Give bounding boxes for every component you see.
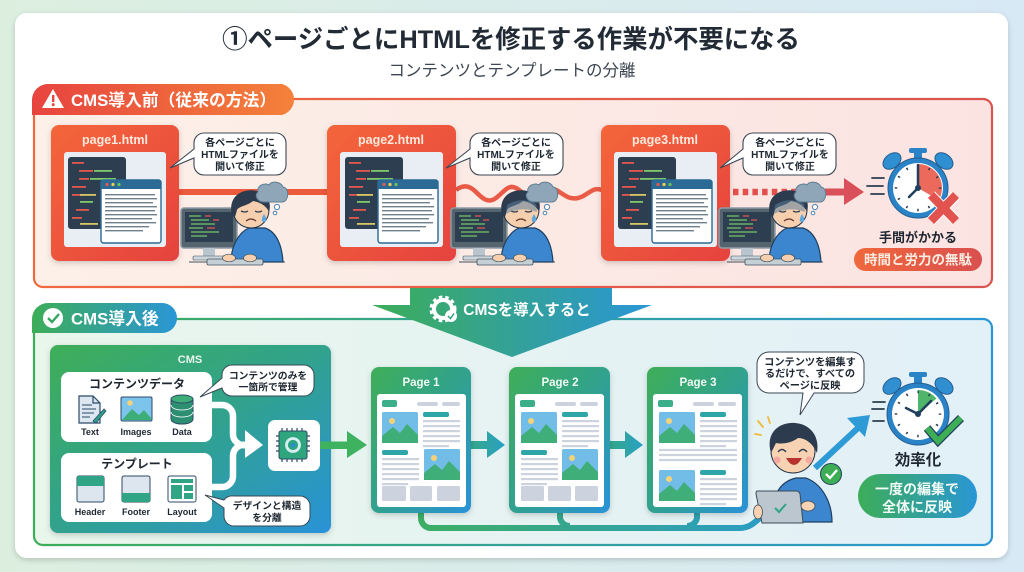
- banner arrow: when CMS is introduced: CMSを導入すると: [463, 300, 591, 319]
- icon: happy editor with tablet: [754, 417, 832, 523]
- icon: clock with check: [872, 372, 961, 445]
- icon: footer: Footer: [122, 507, 150, 517]
- icon: header: Header: [75, 507, 106, 517]
- icon: header: [75, 476, 106, 517]
- icon: data: Data: [172, 427, 193, 437]
- connector: straight line page1 to page2: [179, 189, 329, 195]
- panel: after CMS: [32, 303, 992, 545]
- connector: pages to editor: [421, 513, 762, 528]
- box: template: [61, 453, 212, 522]
- callout: page1: 各ページごとに: [205, 136, 275, 149]
- callout: edit once: るだけで、すべての: [765, 368, 855, 380]
- callout: page3: 各ページごとに: [755, 136, 825, 149]
- connector: wavy line page2 to page3: [456, 186, 602, 200]
- box: content data: コンテンツデータ: [89, 376, 185, 391]
- card: Page 1: [371, 367, 471, 513]
- callout: content only: コンテンツのみを: [229, 370, 307, 382]
- card: Page 1: Page 1: [402, 377, 440, 389]
- white merge arrows: [212, 405, 263, 487]
- box: template: テンプレート: [101, 457, 173, 471]
- icon: clock with cross: [867, 148, 956, 221]
- callout: design and structure: [205, 495, 310, 526]
- box: content data: [61, 372, 212, 442]
- card: Page 2: Page 2: [541, 377, 579, 389]
- card: Page 2: [509, 367, 610, 513]
- icon: text document: [79, 396, 106, 437]
- icon: footer: [122, 476, 150, 517]
- icon: data: [171, 395, 193, 437]
- callout: page3: [720, 133, 836, 175]
- tab: before CMS heading: CMS導入前（従来の方法）: [71, 90, 276, 110]
- panel: CMS: [50, 345, 331, 533]
- tab: after CMS heading: [32, 303, 177, 333]
- arrow: CMS to pages: [320, 431, 367, 458]
- callout: page2: 開いて修正: [491, 160, 541, 173]
- tab: after CMS heading: CMS導入後: [71, 308, 159, 328]
- box: processor: [268, 420, 320, 471]
- card: page1.html: [51, 125, 179, 261]
- tab: before CMS heading: [32, 84, 294, 115]
- callout: content only: [200, 365, 314, 397]
- card: Page 3: [647, 367, 748, 513]
- pill: one edit reflects everywhere: 一度の編集で: [875, 481, 959, 497]
- icon: check badge: [820, 464, 842, 484]
- arrow: page1 to page2: [471, 431, 505, 458]
- icon: images: Images: [120, 427, 152, 437]
- card: page2.html: [327, 125, 456, 261]
- callout: page1: 開いて修正: [215, 160, 265, 173]
- callout: page2: [446, 133, 563, 175]
- callout: design and structure: デザインと構造: [233, 499, 301, 512]
- label: efficiency: 効率化: [895, 451, 942, 469]
- arrow: rising blue arrow: [815, 415, 870, 468]
- card: page2.html: page2.html: [358, 133, 424, 147]
- icon: text document: Text: [81, 427, 99, 437]
- connector: dotted arrow to clock: [733, 178, 864, 205]
- pill: one edit reflects everywhere: [858, 474, 977, 518]
- callout: design and structure: を分離: [252, 511, 282, 524]
- card: page1.html: page1.html: [82, 133, 148, 147]
- arrow: page2 to page3: [610, 431, 643, 458]
- pill: waste of time and effort: 時間と労力の無駄: [864, 252, 972, 268]
- icon: tired developer 1: [181, 182, 288, 265]
- subtitle: コンテンツとテンプレートの分離: [388, 61, 636, 80]
- pill: waste of time and effort: [854, 248, 982, 271]
- callout: edit once: [757, 352, 864, 415]
- callout: page2: 各ページごとに: [481, 136, 551, 149]
- card: page3.html: page3.html: [632, 133, 698, 147]
- callout: edit once: コンテンツを編集す: [764, 356, 856, 368]
- card: Page 3: Page 3: [679, 377, 717, 389]
- icon: layout: Layout: [167, 507, 197, 517]
- callout: edit once: ページに反映: [780, 380, 841, 392]
- card: page3.html: [601, 125, 730, 261]
- icon: gear with check: [431, 297, 457, 322]
- icon: images: [120, 397, 152, 437]
- callout: content only: 一箇所で管理: [239, 380, 298, 394]
- callout: page1: HTMLファイルを: [201, 149, 279, 161]
- label: takes effort: 手間がかかる: [879, 230, 957, 245]
- icon: tired developer 2: [451, 182, 558, 265]
- icon: layout: [167, 476, 197, 517]
- callout: page3: HTMLファイルを: [751, 149, 829, 161]
- icon: tired developer 3: [719, 182, 826, 265]
- banner arrow: when CMS is introduced: [372, 288, 652, 357]
- title: ①ページごとにHTMLを修正する作業が不要になる: [222, 25, 800, 54]
- panel: CMS: CMS: [178, 354, 202, 366]
- panel: before CMS: [32, 84, 992, 287]
- callout: page2: HTMLファイルを: [477, 149, 555, 161]
- callout: page3: 開いて修正: [765, 160, 815, 173]
- pill: one edit reflects everywhere: 全体に反映: [882, 499, 952, 515]
- callout: page1: [170, 133, 286, 175]
